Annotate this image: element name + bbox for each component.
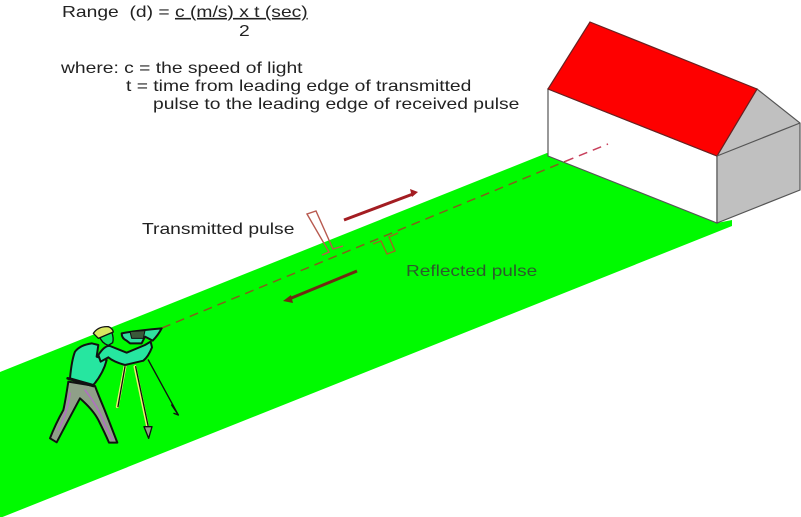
hat [93, 327, 113, 338]
arrow: returning pulse direction [283, 271, 357, 303]
formula numerator: Range (d) = c (m/s) x t (sec) [62, 3, 308, 21]
icon: surveyor with tripod instrument [50, 327, 178, 443]
label: transmitted pulse: Transmitted pulse [142, 220, 295, 238]
definition of t, line two: pulse to the leading edge of received pulse [153, 95, 519, 113]
label: reflected pulse: Reflected pulse [406, 261, 537, 280]
formula denominator: 2 [239, 22, 250, 40]
legs [50, 382, 117, 443]
trouser highlight [58, 390, 113, 440]
house [548, 22, 800, 223]
arm [98, 342, 152, 365]
instrument hood [130, 331, 145, 338]
house: roof [548, 22, 757, 156]
tripod legs [117, 360, 178, 430]
beam on house wall [565, 144, 608, 162]
head [99, 332, 113, 345]
definition of c: where: c = the speed of light [60, 59, 303, 77]
transmitted pulse shape [307, 211, 343, 255]
torso [70, 343, 107, 385]
belt [68, 378, 93, 386]
tripod foot [144, 427, 152, 438]
formula definitions [60, 59, 519, 113]
definition of t, line one: t = time from leading edge of transmitted [126, 77, 471, 95]
house: gable edge line [717, 123, 800, 156]
house: gable side [717, 89, 800, 223]
instrument [122, 328, 162, 343]
house: front wall [548, 89, 717, 223]
beam over ground [162, 162, 565, 328]
reflected pulse shape [373, 233, 398, 254]
range formula [62, 3, 308, 40]
laser beam, dashed [162, 144, 608, 328]
green ground strip [0, 153, 732, 517]
arrow: outgoing pulse direction [344, 189, 418, 220]
